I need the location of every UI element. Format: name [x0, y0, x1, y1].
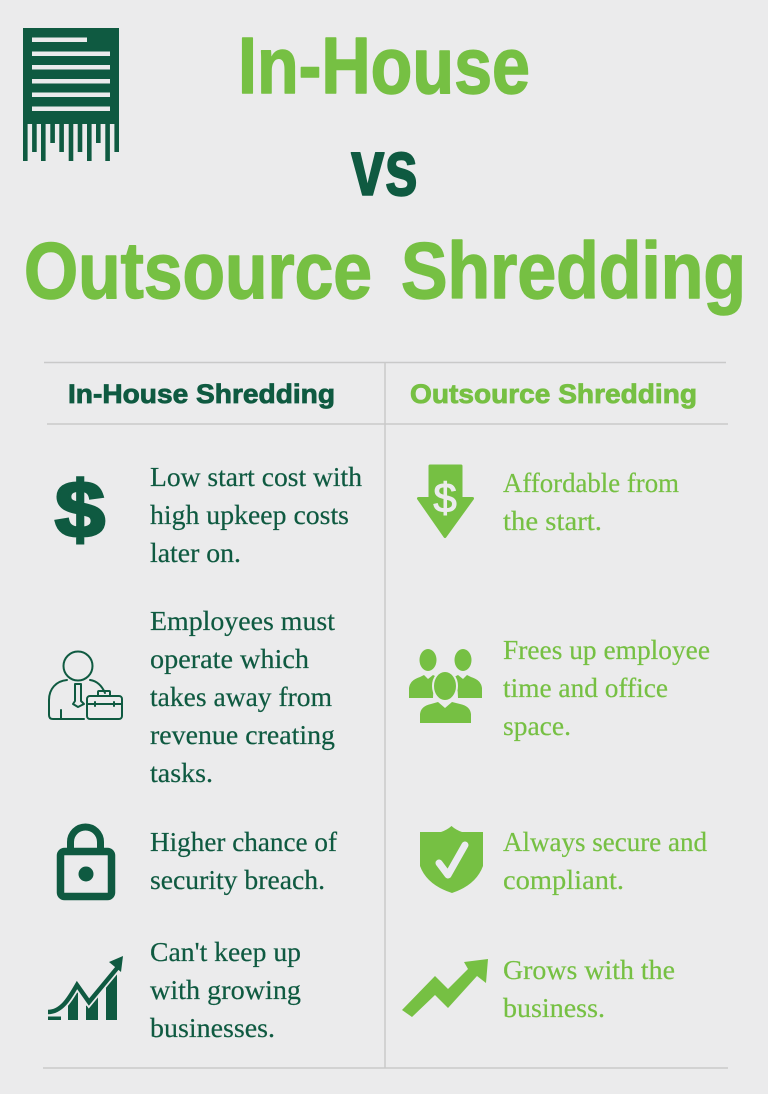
text: employees must operate: revenue creating [150, 720, 335, 750]
text: low start cost [150, 462, 362, 568]
icon: down arrow with dollar: $ [433, 474, 457, 521]
text: frees up employee time [503, 635, 710, 741]
title: Outsource Shredding [24, 226, 746, 315]
title: vs: vs [351, 123, 418, 212]
text: frees up employee time: time and office [503, 673, 668, 703]
text: frees up employee time: Frees up employee [503, 635, 710, 665]
text: low start cost: high upkeep costs [150, 500, 349, 530]
text: low start cost: later on. [150, 538, 241, 568]
icon: three people [409, 649, 482, 723]
icon: padlock [60, 827, 112, 896]
icon: shield with check [420, 826, 483, 893]
icon: down arrow with dollar [418, 466, 472, 536]
text: always secure [503, 827, 707, 895]
text: grows with business: Grows with the [503, 955, 675, 985]
text: grows with business: business. [503, 993, 605, 1023]
icon: rising zigzag arrow [402, 959, 488, 1017]
text: employees must operate: takes away from [150, 682, 332, 712]
text: higher chance of breach: security breach. [150, 865, 325, 895]
text: can't keep up: with growing [150, 975, 301, 1005]
title: Outsource Shredding: Outsource [24, 226, 372, 315]
text: employees must operate: Employees must [150, 606, 336, 636]
icon: dollar sign: $ [55, 465, 105, 554]
text: always secure: compliant. [503, 865, 624, 895]
text: low start cost: Low start cost with [150, 462, 362, 492]
text: always secure: Always secure and [503, 827, 707, 857]
text: can't keep up: businesses. [150, 1013, 275, 1043]
text: employees must operate: tasks. [150, 758, 213, 788]
text: grows with business [503, 955, 675, 1023]
text: can't keep up [150, 937, 301, 1043]
text: affordable: Affordable from [503, 468, 679, 498]
text: can't keep up: Can't keep up [150, 937, 301, 967]
heading: Outsource Shredding: Outsource Shredding [410, 379, 697, 409]
text: higher chance of breach [150, 827, 337, 895]
heading: In-House Shredding: In-House Shredding [68, 379, 335, 409]
text: higher chance of breach: Higher chance of [150, 827, 337, 857]
text: affordable: the start. [503, 506, 602, 536]
icon: employee with briefcase [49, 652, 122, 719]
text: employees must operate: operate which [150, 644, 310, 674]
text: affordable [503, 468, 679, 536]
comparison table rules [43, 362, 728, 1068]
icon: shredded document [23, 28, 119, 161]
icon: rising bar chart with arrow [48, 956, 123, 1020]
title: In-House: In-House [238, 21, 530, 110]
text: employees must operate [150, 606, 336, 788]
text: frees up employee time: space. [503, 711, 571, 741]
